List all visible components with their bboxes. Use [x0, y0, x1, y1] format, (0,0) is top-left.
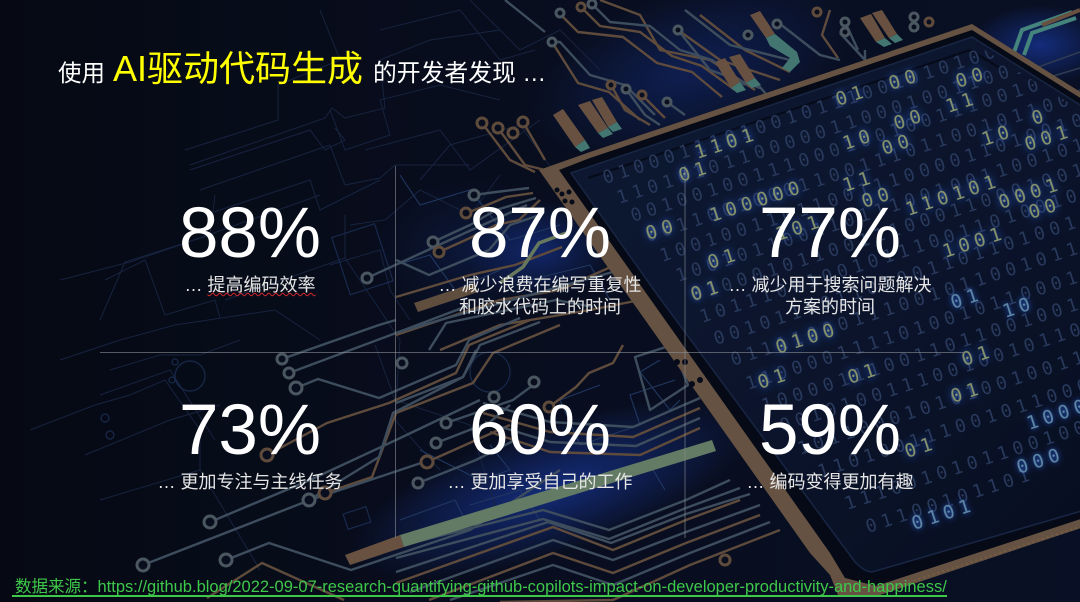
stat: 73% [157, 391, 342, 492]
label: … 更加专注与主线任务 [157, 472, 342, 492]
binary digits on the chip: 01 [959, 340, 997, 371]
binary digits on the chip: 01 [755, 363, 793, 394]
binary digits on the chip [600, 10, 1080, 538]
label: … 减少用于搜索问题解决 [728, 275, 932, 295]
binary digits on the chip: 0101 [909, 494, 978, 535]
binary digits on the chip: 110101 [903, 169, 1003, 221]
binary digits on the chip: 01 [845, 358, 883, 389]
binary digits on the chip: 101 [773, 210, 826, 246]
binary digits on the chip: 00 [879, 129, 917, 160]
binary digits on the chip: 01 [688, 275, 726, 306]
binary digits on the chip: 10 [1000, 292, 1038, 323]
title: 使用AI驱动代码生成 的开发者发现 … [58, 48, 546, 89]
label: … 更加享受自己的工作 [447, 472, 632, 492]
binary digits on the chip: 00 [891, 104, 929, 135]
binary digits on the chip: 01100101101 [863, 463, 1037, 538]
binary digits on the chip: 0100 [773, 318, 842, 359]
binary digits on the chip: 01 [948, 283, 986, 314]
binary digits on the chip: 11 [943, 87, 981, 118]
binary digits on the chip: 00 [643, 214, 681, 245]
binary digits on the chip: 001 [1022, 120, 1075, 156]
binary digits on the chip: 100000 [707, 175, 807, 227]
label: … 减少浪费在编写重复性 [438, 275, 642, 295]
stat: 88% [179, 194, 321, 296]
number 87%: 87% [469, 194, 611, 273]
number 59%: 59% [759, 391, 901, 470]
board strips [345, 10, 1080, 565]
number 60%: 60% [469, 391, 611, 470]
binary digits on the chip: 00 [859, 182, 897, 213]
binary digits on the chip: 01 [948, 377, 986, 408]
label: … 提高编码效率 [184, 275, 316, 295]
label: 方案的时间 [785, 297, 875, 317]
binary digits on the chip: 0 [1029, 104, 1051, 130]
number 88%: 88% [179, 194, 321, 273]
binary digits on the chip: 01 [676, 156, 714, 187]
binary digits on the chip: 00 [953, 62, 991, 93]
number 73%: 73% [179, 391, 321, 470]
divider lines [100, 166, 963, 538]
stat: 59% [746, 391, 914, 492]
number 77%: 77% [759, 194, 901, 273]
binary digits on the chip: 01 [705, 243, 743, 274]
circuit pads [137, 0, 933, 571]
stat: 87% [438, 194, 642, 317]
binary digits on the chip: 0001 [996, 173, 1065, 214]
label [728, 275, 932, 317]
label: … 编码变得更加有趣 [746, 472, 914, 492]
binary digits on the chip: 10 [979, 120, 1017, 151]
stat: 60% [447, 391, 632, 492]
binary digits on the chip: 000 [1014, 443, 1067, 479]
binary digits on the chip: 01 [902, 432, 940, 463]
binary digits on the chip: 00 [886, 64, 924, 95]
stat: 77% [728, 194, 932, 317]
binary digits on the chip: 01000111010010111001010100110 [600, 25, 1049, 189]
traces [143, 0, 865, 602]
label [438, 275, 642, 317]
binary digits on the chip: 00 [1026, 193, 1064, 224]
binary digits on the chip: 1001 [940, 222, 1009, 263]
binary digits on the chip: 11 [840, 166, 878, 197]
label: 和胶水代码上的时间 [459, 297, 621, 317]
binary digits on the chip: 10 [840, 124, 878, 155]
chip body [539, 24, 1080, 595]
binary digits on the chip: 1101 [692, 123, 761, 164]
binary digits on the chip: 01 [833, 80, 871, 111]
source link: 数据来源：https://github.blog/2022-09-07-research-quantifying-github-copilots-impact-on-developer-productivity-and-happiness/ [15, 578, 947, 596]
